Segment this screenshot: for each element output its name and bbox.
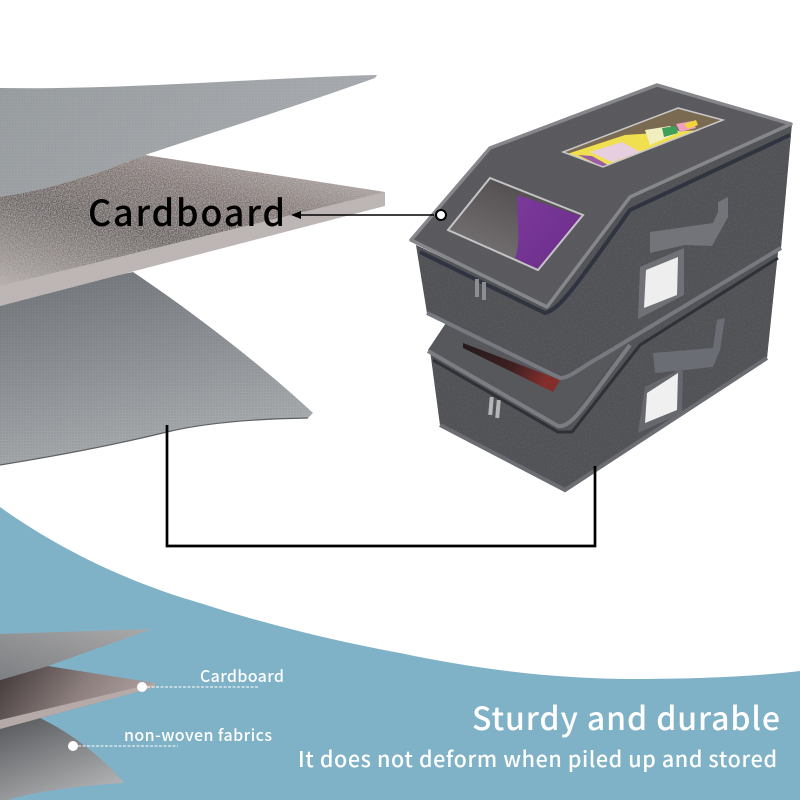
small top sheet bbox=[0, 629, 152, 680]
top box lid bbox=[411, 85, 791, 307]
callout: large Cardboard label: Cardboard bbox=[88, 185, 285, 237]
layer: cardboard sheet bbox=[0, 155, 385, 306]
top box label pocket bbox=[638, 248, 684, 319]
bottom box window bbox=[463, 343, 560, 392]
top box body bbox=[416, 123, 792, 378]
bottom box bbox=[428, 252, 778, 490]
bottom box lid bbox=[428, 258, 778, 432]
callout: small Cardboard marker: Cardboard bbox=[200, 663, 284, 687]
top window with colourful contents bbox=[563, 108, 723, 167]
heading: Sturdy and durable bbox=[472, 694, 780, 740]
bottom box label pocket bbox=[638, 368, 683, 433]
material layers: small diagram bbox=[0, 629, 155, 800]
top box handle bbox=[650, 197, 728, 253]
top box bbox=[411, 85, 792, 378]
blue wave panel bbox=[0, 507, 800, 800]
callout: non-woven fabrics marker bbox=[68, 722, 272, 751]
top box zipper pull bbox=[475, 279, 486, 300]
callout: non-woven fabrics marker: non-woven fabrics bbox=[124, 722, 272, 746]
small cardboard sheet bbox=[0, 666, 155, 729]
front window with purple fabric bbox=[448, 178, 583, 270]
top box zipper bbox=[420, 135, 790, 313]
product: stacked storage boxes bbox=[411, 85, 792, 490]
bottom box handle bbox=[653, 318, 725, 373]
callout: small Cardboard marker bbox=[137, 663, 284, 692]
connector: fabric sheet to box base bbox=[167, 425, 595, 546]
layer: lower non-woven fabric sheet bbox=[0, 272, 313, 465]
bottom box body bbox=[430, 252, 778, 490]
arrow: cardboard label to box lid bbox=[291, 210, 446, 220]
bottom box zipper pull bbox=[488, 397, 501, 418]
layer: top non-woven fabric sheet bbox=[0, 75, 377, 197]
subheading: It does not deform when piled up and stored bbox=[298, 743, 777, 774]
small lower sheet bbox=[0, 718, 124, 800]
material layers: large exploded view bbox=[0, 75, 385, 465]
